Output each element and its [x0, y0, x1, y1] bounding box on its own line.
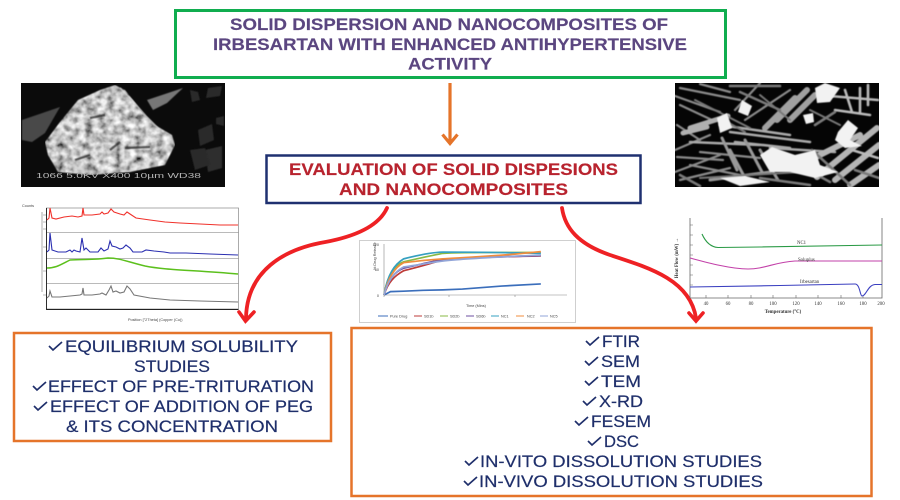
- panel: characterization studies: IN-VITO DISSOLUTION STUDIES: [480, 453, 762, 471]
- DSC thermogram: 160: [837, 302, 845, 307]
- DSC thermogram: Temperature (°C): [765, 310, 802, 315]
- arrow: title to evaluation: [442, 83, 458, 144]
- DSC thermogram: 80: [749, 302, 754, 307]
- DSC thermogram: 140: [814, 302, 822, 307]
- drug release line chart: 60: [375, 268, 379, 272]
- panel: solubility studies: STUDIES: [134, 358, 210, 376]
- drug release line chart: [360, 240, 576, 322]
- panel: characterization studies: [352, 328, 872, 496]
- DSC thermogram: 180: [859, 302, 867, 307]
- panel: characterization studies: IN-VIVO DISSOLUTION STUDIES: [479, 473, 763, 491]
- evaluation box: [266, 156, 640, 203]
- evaluation box: EVALUATION OF SOLID DISPESIONS: [289, 161, 618, 179]
- SEM image: irregular particle: [21, 83, 225, 187]
- title box: SOLID DISPERSION AND NANOCOMPOSITES OF: [230, 16, 668, 34]
- panel: characterization studies: TEM: [601, 373, 641, 391]
- DSC thermogram: 40: [704, 302, 709, 307]
- panel: characterization studies: FTIR: [602, 333, 640, 351]
- drug release line chart: 0: [377, 294, 379, 298]
- panel: characterization studies: X-RD: [599, 393, 643, 411]
- panel: characterization studies: SEM: [601, 353, 640, 371]
- DSC thermogram: 200: [877, 302, 885, 307]
- DSC thermogram: Soluplus: [798, 258, 815, 263]
- red arrow to left list: [239, 208, 387, 321]
- DSC thermogram: 120: [792, 302, 800, 307]
- DSC thermogram: 100: [769, 302, 777, 307]
- drug release line chart: SD2b: [450, 314, 460, 318]
- drug release line chart: NC2: [527, 314, 535, 318]
- panel: solubility studies: EFFECT OF PRE-TRITURATION: [48, 378, 314, 396]
- title box: [176, 10, 726, 78]
- DSC thermogram: [675, 218, 885, 315]
- DSC thermogram: NC1: [797, 241, 807, 246]
- DSC thermogram: 60: [726, 302, 731, 307]
- XRD chart: Counts: [22, 204, 34, 208]
- drug release line chart: NC1: [501, 314, 509, 318]
- drug release line chart: Pure Drug: [390, 314, 407, 318]
- panel: solubility studies: EFFECT OF ADDITION OF PEG: [50, 398, 313, 416]
- drug release line chart: SD6b: [476, 314, 486, 318]
- drug release line chart: NC5: [550, 314, 558, 318]
- drug release line chart: Time (Mins): [466, 304, 487, 308]
- XRD chart: Position [°2Theta] (Copper (Cu)): [128, 318, 183, 322]
- drug release line chart: % Drug Release: [373, 242, 377, 270]
- DSC thermogram: Heat Flow (mW) →: [675, 238, 680, 278]
- title box: ACTIVITY: [408, 56, 492, 74]
- drug release line chart: SD1b: [424, 314, 434, 318]
- title box: IRBESARTAN WITH ENHANCED ANTIHYPERTENSIVE: [213, 36, 687, 54]
- red arrow to right list: [562, 208, 703, 321]
- panel: solubility studies: & ITS CONCENTRATION: [66, 418, 278, 436]
- panel: characterization studies: FESEM: [591, 413, 651, 431]
- panel: solubility studies: [14, 333, 331, 441]
- XRD chart: [22, 204, 238, 322]
- SEM image: rod crystals: [675, 83, 879, 187]
- panel: characterization studies: DSC: [604, 433, 639, 451]
- drug release line chart: 120: [373, 243, 379, 247]
- SEM image: irregular particle: 1066 5.0KV X400 10µm WD38: [36, 173, 201, 180]
- DSC thermogram: Irbesartan: [800, 280, 820, 285]
- evaluation box: AND NANOCOMPOSITES: [339, 181, 568, 199]
- panel: solubility studies: EQUILIBRIUM SOLUBILITY: [65, 338, 298, 356]
